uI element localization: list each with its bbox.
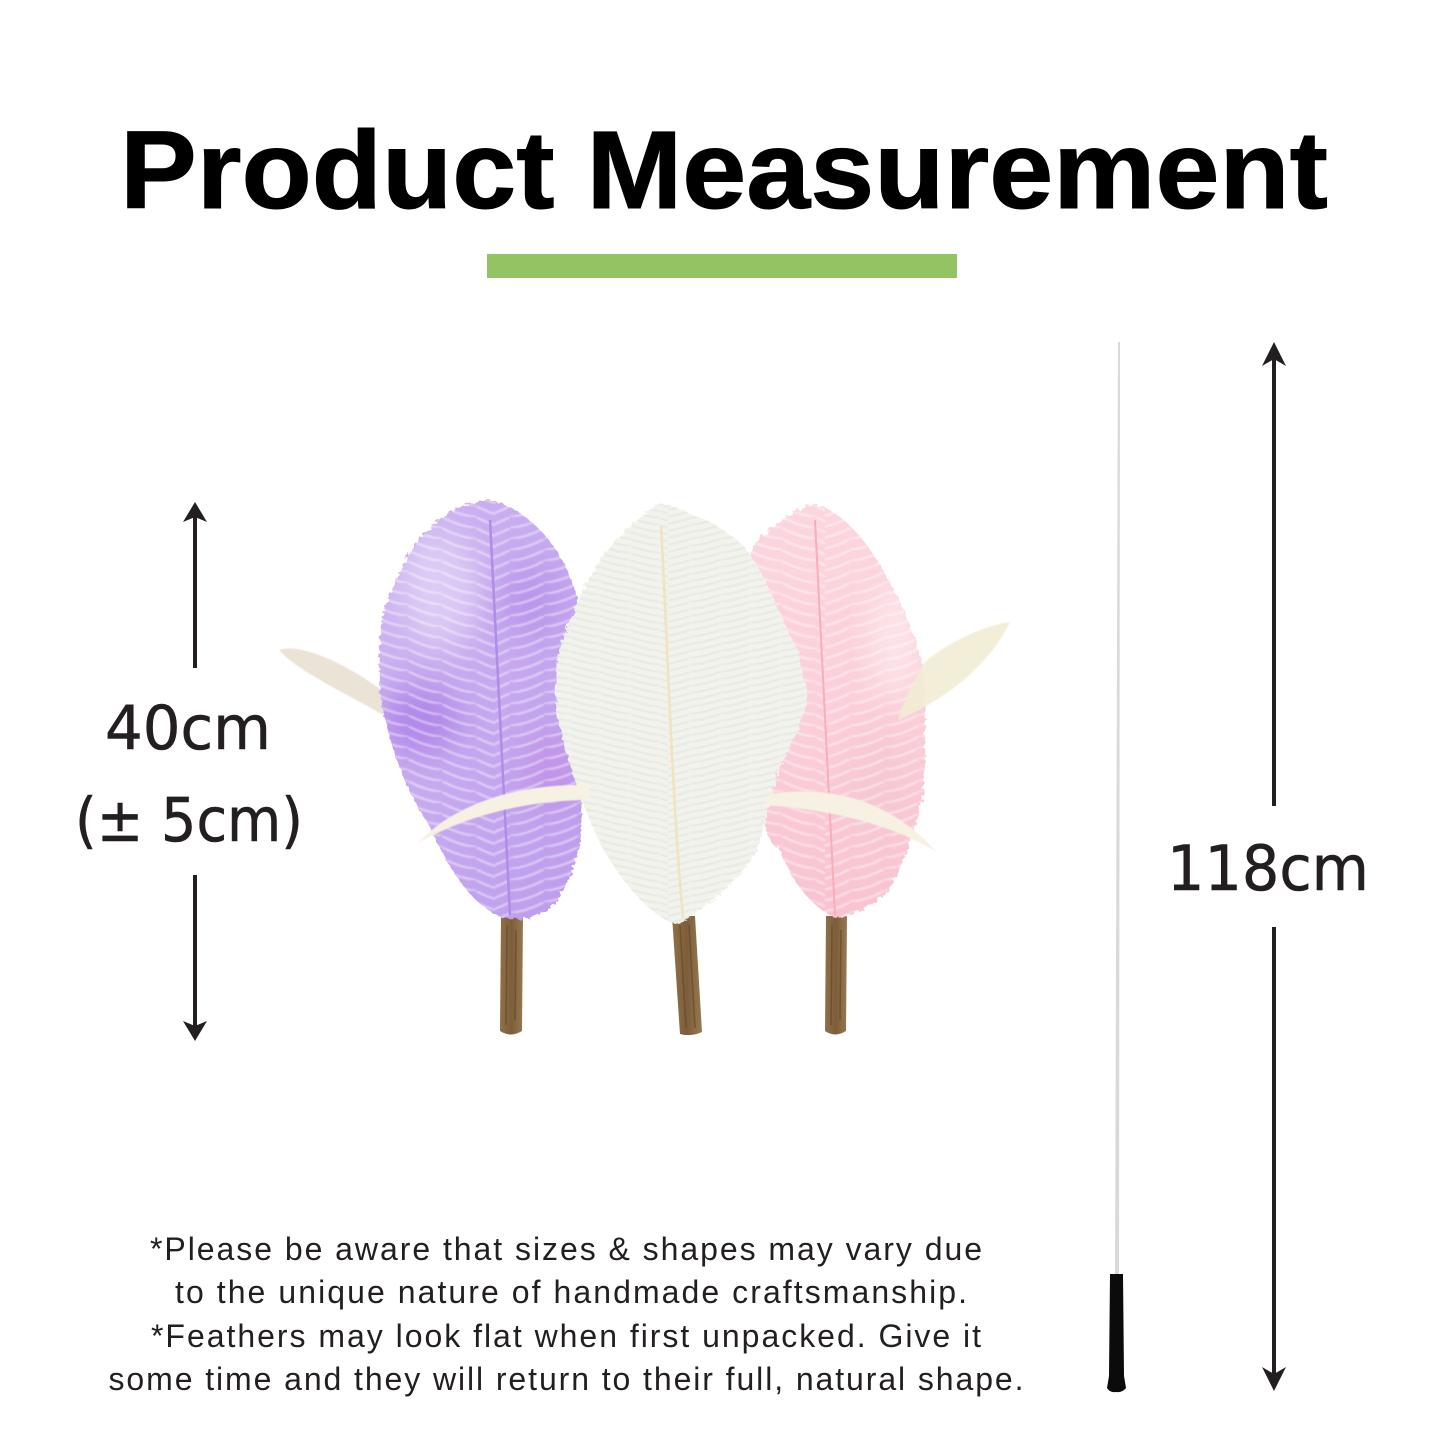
white feather quill xyxy=(661,526,683,918)
measurement: stick length xyxy=(1167,342,1369,1391)
feather: small left plume xyxy=(279,648,392,720)
footnote: to the unique nature of handmade craftsmanship. xyxy=(175,1274,967,1310)
stem: lilac xyxy=(500,916,523,1034)
title underline xyxy=(487,254,957,278)
arrow: up xyxy=(1262,342,1286,806)
label: tolerance: (± 5cm) xyxy=(75,785,303,856)
feather product photo xyxy=(279,495,1010,1035)
footnote xyxy=(108,1231,1024,1397)
arrow: down xyxy=(1262,927,1286,1391)
arrow: down xyxy=(183,875,207,1041)
infographic canvas xyxy=(80,128,1364,1396)
footnote: *Feathers may look flat when first unpacked. Give it xyxy=(151,1318,981,1354)
footnote: *Please be aware that sizes & shapes may vary due xyxy=(150,1231,982,1267)
feather: white xyxy=(550,500,813,930)
footnote: some time and they will return to their full, natural shape. xyxy=(108,1361,1024,1397)
feather: lilac xyxy=(370,495,590,925)
stick handle xyxy=(1107,1274,1126,1392)
stem: white xyxy=(672,916,702,1035)
label: 40cm: 40cm xyxy=(105,693,271,764)
label: 118cm: 118cm xyxy=(1167,832,1369,905)
measurement: feather height xyxy=(75,502,303,1041)
feather: small right plume xyxy=(898,622,1010,720)
product: long stick xyxy=(1107,342,1126,1392)
title: Product Measurement xyxy=(120,109,1328,232)
feather: pink xyxy=(745,500,930,925)
stem: pink xyxy=(825,916,847,1034)
feather: curved plume left xyxy=(418,785,590,843)
arrow: up xyxy=(183,502,207,668)
feather: curved plume right xyxy=(765,791,937,852)
stick shaft xyxy=(1115,342,1120,1275)
